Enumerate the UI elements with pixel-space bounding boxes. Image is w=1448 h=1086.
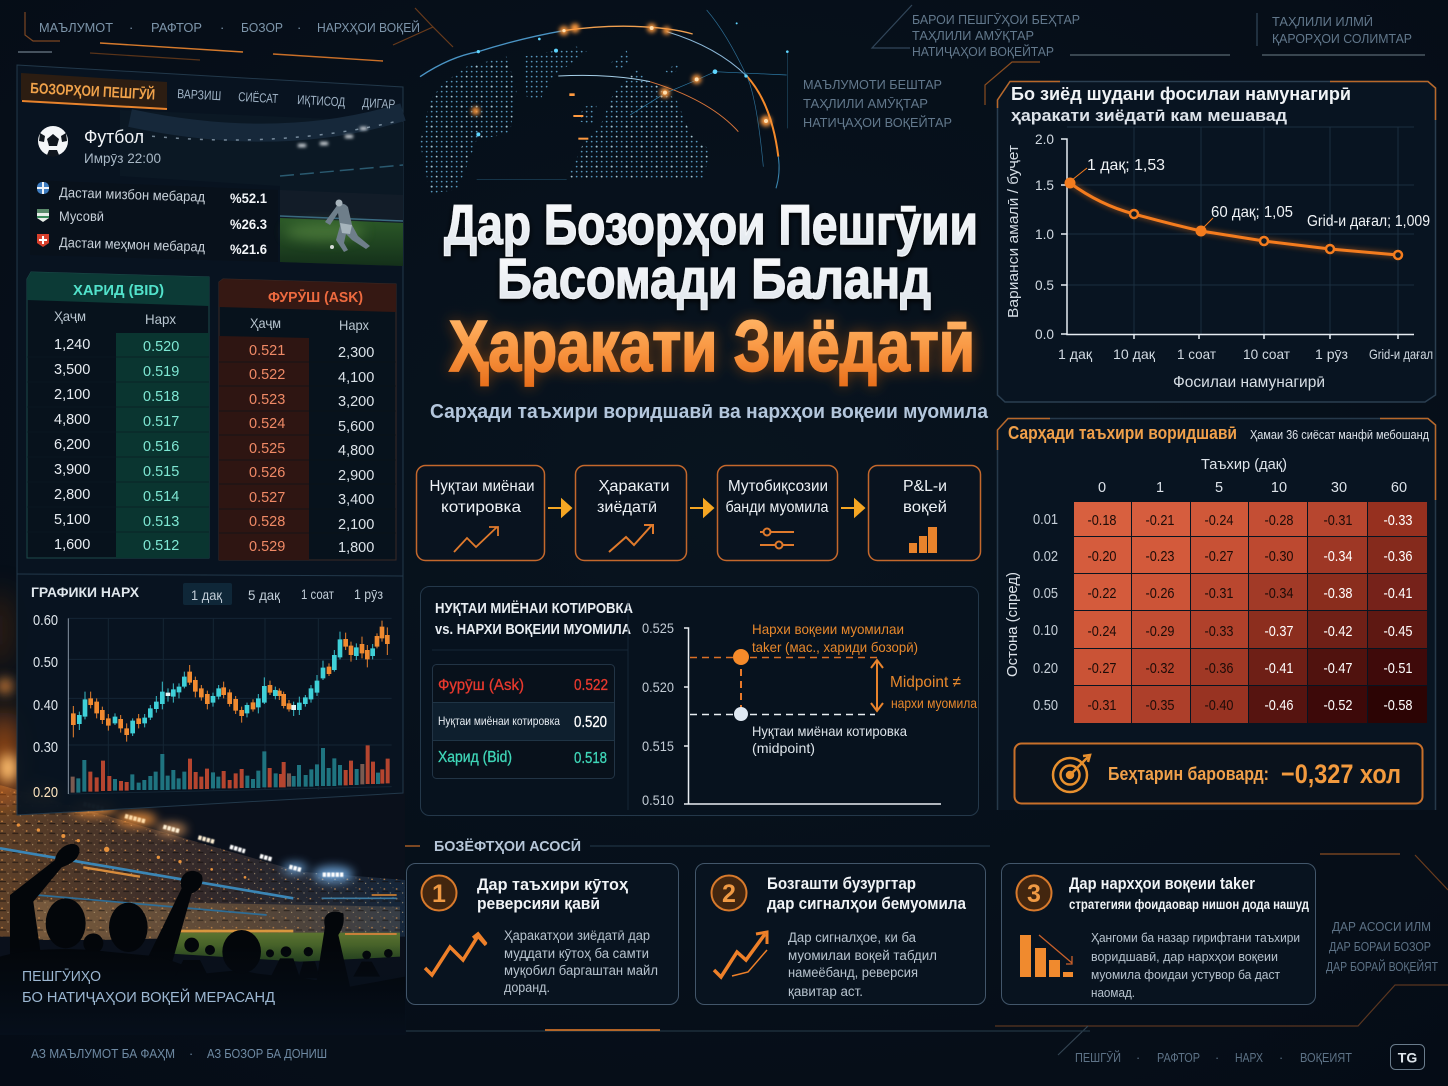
icon: zigzag arrow: [425, 934, 486, 975]
timeframe tabs: 5 дақ: [248, 587, 281, 603]
footer right: ПЕШГӮЙ: [1075, 1050, 1121, 1065]
card: finding 3: Дар нархҳои воқеии taker: [1069, 874, 1255, 893]
heatmap: 0: [1098, 480, 1106, 496]
badge 2: 2: [722, 880, 736, 908]
line chart: Grid-и дағал: [1369, 346, 1433, 362]
main title: [444, 193, 978, 387]
heatmap: -0.18: [1088, 512, 1116, 529]
footer left: ·: [189, 1047, 193, 1061]
order book: bid: 1,600: [54, 537, 90, 553]
top right note 1: НАТИҶАҲОИ ВОҚЕЙТАР: [912, 44, 1054, 59]
footer left: АЗ МАЪЛУМОТ БА ФАҲМ: [31, 1047, 175, 1061]
order book: ask: 3,200: [338, 394, 374, 410]
heatmap: 30: [1331, 480, 1347, 496]
badge 1: 1: [432, 880, 446, 908]
globe network: [420, 10, 789, 193]
quote table: 0.520: [574, 714, 607, 731]
order book: bid: 0.512: [143, 538, 179, 554]
outcome list: %52.1: [230, 190, 267, 206]
language badge: [1390, 1044, 1424, 1070]
side note: НАТИҶАҲОИ ВОҚЕЙТАР: [803, 115, 952, 130]
line chart: 1 соат: [1177, 346, 1217, 362]
panel heading: Бо зиёд шудани фосилаи намунагирӣ: [1011, 84, 1351, 104]
main title: Басомади Баланд: [497, 247, 931, 311]
subtitle: Сарҳади таъхири воридшавӣ ва нархҳои воқеии муомила: [430, 401, 989, 423]
quote table: 0.518: [574, 750, 607, 767]
panel: prediction market: [17, 65, 403, 815]
heatmap: -0.28: [1264, 512, 1294, 529]
order book: bid: 6,200: [54, 437, 90, 453]
panel heading: [435, 600, 633, 638]
volume bars: [73, 745, 388, 793]
price chart: Нархи воқеии муомилаи: [752, 621, 904, 637]
heatmap: -0.33: [1204, 623, 1234, 640]
order book: ask: 2,900: [338, 468, 374, 484]
order book: ask: 2,300: [338, 345, 374, 361]
heatmap: -0.21: [1146, 512, 1174, 529]
heatmap: 60: [1391, 480, 1407, 496]
heatmap: -0.31: [1088, 697, 1116, 714]
card: finding 2: [696, 864, 986, 1004]
price chart: taker (мас., хариди бозорӣ): [752, 639, 918, 655]
quote table: Харид (Bid): [438, 749, 512, 766]
heading: key findings: БОЗЁФТҲОИ АСОСӢ: [434, 838, 581, 855]
card: finding 3: муомила фоидаи устувор ба даст: [1091, 967, 1280, 982]
price chart: 0.520: [642, 679, 674, 695]
active tab: [21, 73, 167, 109]
heatmap: -0.35: [1146, 697, 1174, 714]
top right note 2: ТАҲЛИЛИ ИЛМӢ: [1272, 14, 1373, 29]
top nav: МАЪЛУМОТ: [39, 20, 113, 35]
line chart: [1005, 127, 1433, 391]
arrow: [841, 500, 864, 516]
line chart: 2.0: [1035, 131, 1054, 147]
flow diagram: [416, 466, 980, 560]
price chart: нархи муомила: [891, 695, 977, 711]
panel: entry delay threshold heatmap: [998, 418, 1436, 810]
top right note 1: [912, 12, 1080, 59]
arrow: [690, 500, 713, 516]
price chart: 0.510: [642, 792, 674, 808]
card: finding 3: наомад.: [1091, 985, 1135, 1000]
footer left: АЗ БОЗОР БА ДОНИШ: [207, 1047, 327, 1061]
heatmap: -0.27: [1204, 548, 1234, 565]
outcome list: Мусовӣ: [59, 208, 104, 224]
order book: ask: 3,400: [338, 492, 374, 508]
order book: bid: 0.515: [143, 464, 179, 480]
order book: bid: 0.518: [143, 389, 179, 405]
heatmap: -0.24: [1204, 512, 1234, 529]
top nav: НАРХҲОИ ВОҚЕЙ: [317, 20, 420, 35]
order book: bid: [27, 272, 209, 558]
order book: ask: 0.527: [249, 490, 285, 506]
icon: football: [38, 126, 68, 157]
flow box: real PnL: воқей: [903, 499, 947, 516]
heatmap: -0.41: [1264, 660, 1294, 677]
flow box: excess move: зиёдатӣ: [597, 499, 657, 516]
flow box: trade size adjustment: банди муомила: [726, 499, 829, 516]
footer right: ·: [1136, 1051, 1140, 1065]
order book: ask: 0.529: [249, 539, 285, 555]
callout: best result: Беҳтарин баровард:: [1108, 764, 1269, 784]
main title: Ҳаракати Зиёдатӣ: [449, 307, 975, 387]
heatmap: 0.01: [1033, 512, 1058, 528]
order book: ask: [219, 279, 396, 560]
order book: bid: 3,500: [54, 362, 90, 378]
price chart: 0.525: [642, 620, 674, 636]
top nav: ·: [297, 20, 301, 35]
badge 2: [712, 876, 746, 910]
photo: stadium crowd: [0, 780, 405, 1033]
timeframe tabs: 1 рӯз: [354, 586, 383, 602]
tabs: [177, 86, 396, 112]
caption: predictions: БО НАТИҶАҲОИ ВОҚЕЙ МЕРАСАНД: [22, 988, 275, 1006]
teal bodies: [77, 639, 375, 733]
tabs: ИҚТИСОД: [297, 92, 346, 110]
quote table: Нуқтаи миёнаи котировка: [438, 714, 560, 728]
panel heading: ҳаракати зиёдатӣ кам мешавад: [1011, 106, 1287, 125]
heatmap: 10: [1271, 480, 1287, 496]
side note: basis: [1326, 919, 1438, 974]
order book: ask: 0.525: [249, 441, 285, 457]
heatmap: -0.38: [1324, 585, 1352, 602]
flow box: real PnL: [868, 466, 980, 560]
flow box: midpoint: Нуқтаи миёнаи: [430, 478, 534, 495]
top nav: ·: [220, 20, 224, 35]
order book: bid: 5,100: [54, 512, 90, 528]
card: finding 1: Дар таъхири кӯтоҳ: [477, 875, 629, 894]
heatmap: -0.42: [1324, 623, 1352, 640]
line chart: 10 дақ: [1113, 346, 1156, 362]
heatmap: [1004, 456, 1427, 723]
line chart: 60 дақ; 1,05: [1211, 204, 1293, 221]
panel: sampling interval chart: [998, 82, 1436, 402]
panel heading: vs. НАРХИ ВОҚЕИИ МУОМИЛА: [435, 621, 631, 638]
line chart: Фосилаи намунагирӣ: [1173, 374, 1325, 391]
chart heading: ГРАФИКИ НАРХ: [31, 584, 140, 600]
card: finding 1: доранд.: [504, 980, 550, 995]
flow box: real PnL: P&L-и: [903, 478, 947, 495]
main title: Дар Бозорҳои Пешгӯии: [444, 193, 978, 257]
candlestick chart: 0.20: [33, 784, 58, 801]
heatmap: -0.24: [1088, 623, 1116, 640]
line chart: Варианси амалӣ / буҷет: [1005, 145, 1022, 318]
top right note 1: БАРОИ ПЕШГӮҲОИ БЕҲТАР: [912, 12, 1080, 27]
heatmap: -0.20: [1088, 548, 1116, 565]
arrow: [548, 500, 571, 516]
card: finding 2: муомилаи воқей табдил: [788, 948, 937, 963]
order book: bid: 4,800: [54, 412, 90, 428]
top nav: РАФТОР: [151, 20, 202, 35]
order book: bid: Нарх: [145, 311, 176, 327]
heatmap: 0.50: [1033, 698, 1058, 714]
order book: bid: 0.514: [143, 489, 179, 505]
order book: ask: 0.528: [249, 514, 285, 530]
tabs: ДИГАР: [362, 95, 396, 112]
outcome list: [30, 180, 278, 262]
price chart: [642, 620, 977, 808]
quote table: 0.522: [574, 677, 608, 694]
price chart: Нуқтаи миёнаи котировка: [752, 723, 907, 739]
heatmap: -0.58: [1384, 697, 1412, 714]
order book: bid: 0.516: [143, 439, 179, 455]
heatmap: -0.47: [1324, 660, 1352, 677]
heatmap: -0.34: [1264, 585, 1294, 602]
order book: ask: 0.524: [249, 416, 285, 432]
flow box: trade size adjustment: [718, 466, 838, 560]
heatmap: Таъхир (дақ): [1201, 456, 1287, 473]
panel: midpoint vs real price: [420, 586, 978, 816]
heatmap: 0.10: [1033, 623, 1058, 639]
heading: football: Имрӯз 22:00: [84, 150, 161, 166]
card: finding 1: [406, 864, 678, 1004]
heatmap: -0.31: [1324, 512, 1352, 529]
card: finding 3: воридшавӣ, дар нархҳои воқеии: [1091, 949, 1278, 964]
heatmap: -0.23: [1146, 548, 1174, 565]
line chart: 1 дақ; 1,53: [1087, 157, 1165, 174]
orange bodies: [71, 627, 390, 735]
callout: best result: [1014, 744, 1422, 804]
line chart: 1.5: [1035, 177, 1054, 193]
card: finding 1: Ҳаракатҳои зиёдатӣ дар: [504, 928, 650, 943]
price chart: (midpoint): [752, 740, 815, 756]
order book: bid: 0.513: [143, 514, 179, 530]
order book: ask: Нарх: [339, 317, 369, 333]
heatmap: -0.41: [1384, 585, 1412, 602]
footer right: ·: [1279, 1051, 1283, 1065]
order book: bid: 2,100: [54, 387, 90, 403]
panel heading: [1011, 84, 1351, 125]
line chart: 10 соат: [1243, 346, 1291, 362]
heatmap: 0.02: [1033, 549, 1058, 565]
card: finding 3: [1002, 864, 1316, 1004]
icon: falling bars: [1020, 935, 1073, 977]
panel heading: НУҚТАИ МИЁНАИ КОТИРОВКА: [435, 600, 633, 617]
order book: ask: 4,100: [338, 370, 374, 386]
order book: ask: 0.526: [249, 465, 285, 481]
footer right: НАРХ: [1235, 1051, 1264, 1065]
order book: bid: 3,900: [54, 462, 90, 478]
outcome list: %26.3: [230, 216, 267, 232]
order book: bid: 0.520: [143, 339, 179, 355]
flow box: trade size adjustment: Мутобиқсозии: [728, 478, 828, 495]
order book: bid: Ҳаҷм: [54, 308, 86, 324]
card: finding 3: стратегияи фоидаовар нишон дода нашуд: [1069, 896, 1309, 912]
card: finding 2: Дар сигналҳое, ки ба: [788, 930, 916, 945]
panel heading: Сарҳади таъхири воридшавӣ: [1008, 423, 1237, 443]
heatmap: -0.46: [1264, 697, 1294, 714]
order book: bid: 0.517: [143, 414, 179, 430]
caption: predictions: ПЕШГӮИҲО: [22, 968, 101, 985]
heatmap: -0.51: [1384, 660, 1412, 677]
candlestick chart: 0.50: [33, 654, 58, 671]
card: finding 3: Ҳангоми ба назар гирифтани таъхири: [1091, 930, 1300, 945]
order book: ask: 1,800: [338, 540, 374, 556]
line chart: 1 рӯз: [1315, 346, 1348, 362]
card: finding 2: дар сигналҳои бемуомила: [767, 894, 966, 913]
badge 3: [1016, 876, 1052, 910]
line chart: 1.0: [1035, 226, 1054, 242]
candlestick chart: 0.30: [33, 739, 58, 756]
timeframe tabs: 1 дақ: [191, 587, 223, 603]
price chart: Midpoint ≠: [890, 674, 961, 691]
photo: player: [280, 190, 403, 266]
outcome list: Дастаи мизбон мебарад: [59, 184, 205, 205]
heatmap: -0.22: [1088, 585, 1116, 602]
outcome list: Дастаи меҳмон мебарад: [59, 234, 205, 255]
order book: ask: ФУРӮШ (ASK): [268, 289, 363, 306]
caption fade: [0, 945, 406, 1035]
heatmap: 0.20: [1033, 661, 1058, 677]
outcome list: %21.6: [230, 241, 267, 257]
heatmap: -0.32: [1146, 660, 1174, 677]
card: finding 1: реверсияи қавӣ: [477, 894, 600, 913]
side note: basis: ДАР АСОСИ ИЛМ: [1332, 919, 1431, 934]
top right note 1: ТАҲЛИЛИ АМӮҚТАР: [912, 28, 1034, 43]
badge 3: 3: [1027, 880, 1041, 908]
card: finding 1: муддати кӯтоҳ ба самти: [504, 946, 649, 961]
top nav: ·: [129, 20, 133, 35]
icon: target: [1053, 755, 1090, 792]
orange sparks glow: [0, 590, 62, 810]
line chart: 1 дақ: [1058, 346, 1093, 362]
panel heading: [1008, 423, 1429, 443]
stadium backdrop: [120, 110, 403, 266]
flow box: midpoint: котировка: [441, 499, 521, 516]
heatmap: -0.29: [1146, 623, 1174, 640]
heatmap: -0.45: [1384, 623, 1412, 640]
footer right: [1075, 1050, 1352, 1065]
icon: double arrow: [714, 932, 767, 977]
heatmap: -0.27: [1088, 660, 1116, 677]
tabs: ВАРЗИШ: [177, 86, 222, 103]
order book: bid: 1,240: [54, 337, 90, 353]
order book: bid: ХАРИД (BID): [73, 282, 164, 299]
side note: ТАҲЛИЛИ АМӮҚТАР: [803, 96, 928, 111]
footer left: [31, 1047, 327, 1061]
heatmap: -0.52: [1324, 697, 1352, 714]
badge 1: [422, 876, 456, 910]
quote table: Фурӯш (Ask): [438, 677, 524, 694]
side note: basis: ДАР БОРАИ БОЗОР: [1329, 939, 1431, 954]
order book: ask: Ҳаҷм: [250, 315, 281, 331]
caption: predictions: [22, 968, 275, 1006]
card: finding 2: Бозгашти бузургтар: [767, 874, 916, 893]
candlestick chart: 0.40: [33, 697, 58, 714]
heading: football: Футбол: [84, 127, 144, 147]
line chart: 0.5: [1035, 277, 1054, 293]
flow box: midpoint: [416, 466, 544, 560]
heatmap: -0.33: [1384, 512, 1412, 529]
heatmap: 1: [1156, 480, 1164, 496]
language badge: TG: [1398, 1050, 1417, 1066]
heatmap: -0.26: [1146, 585, 1174, 602]
order book: bid: 2,800: [54, 487, 90, 503]
card: finding 2: қавитар аст.: [788, 984, 863, 999]
active tab: БОЗОРҲОИ ПЕШГӮЙ: [30, 79, 156, 104]
heatmap: Остона (спред): [1004, 572, 1021, 677]
footer right: ВОҚЕИЯТ: [1300, 1051, 1352, 1065]
card: finding 1: муқобил баргаштан майл: [504, 963, 658, 978]
footer right: РАФТОР: [1157, 1051, 1200, 1065]
order book: ask: 0.523: [249, 392, 285, 408]
order book: ask: 5,600: [338, 419, 374, 435]
top right note 2: [1272, 14, 1412, 46]
quote table: [432, 664, 614, 778]
callout: best result: −0,327 хол: [1281, 759, 1401, 789]
heatmap: -0.30: [1264, 548, 1294, 565]
side note: МАЪЛУМОТИ БЕШТАР: [803, 77, 942, 92]
candlestick chart: 0.60: [33, 612, 58, 629]
heatmap: -0.40: [1204, 697, 1234, 714]
heatmap: -0.37: [1264, 623, 1294, 640]
candlestick chart: [33, 612, 392, 801]
top nav: БОЗОР: [241, 20, 283, 35]
heatmap: 5: [1215, 480, 1223, 496]
order book: bid: 0.519: [143, 364, 179, 380]
heatmap: 0.05: [1033, 586, 1058, 602]
side note: [803, 77, 952, 130]
tabs: СИЁСАТ: [238, 89, 279, 106]
wicks: [73, 621, 387, 742]
order book: ask: 2,100: [338, 517, 374, 533]
order book: ask: 4,800: [338, 443, 374, 459]
flow box: excess move: Ҳаракати: [598, 478, 670, 495]
card: finding 2: намеёбанд, реверсия: [788, 965, 918, 980]
heatmap: -0.36: [1384, 548, 1412, 565]
line chart: 0.0: [1035, 326, 1054, 342]
top nav: [39, 20, 420, 35]
line chart: Grid-и дағал; 1,009: [1307, 213, 1430, 230]
timeframe tabs: [183, 583, 383, 605]
order book: ask: 0.522: [249, 367, 285, 383]
timeframe tabs: 1 соат: [301, 586, 334, 602]
price chart: 0.515: [642, 738, 674, 754]
heatmap: -0.36: [1204, 660, 1234, 677]
heatmap: -0.34: [1324, 548, 1352, 565]
flow box: excess move: [576, 466, 686, 560]
order book: ask: 0.521: [249, 343, 285, 359]
top right note 2: ҚАРОРҲОИ СОЛИМТАР: [1272, 31, 1412, 46]
heatmap: -0.31: [1204, 585, 1234, 602]
heading: football: [84, 127, 161, 166]
footer right: ·: [1215, 1051, 1219, 1065]
